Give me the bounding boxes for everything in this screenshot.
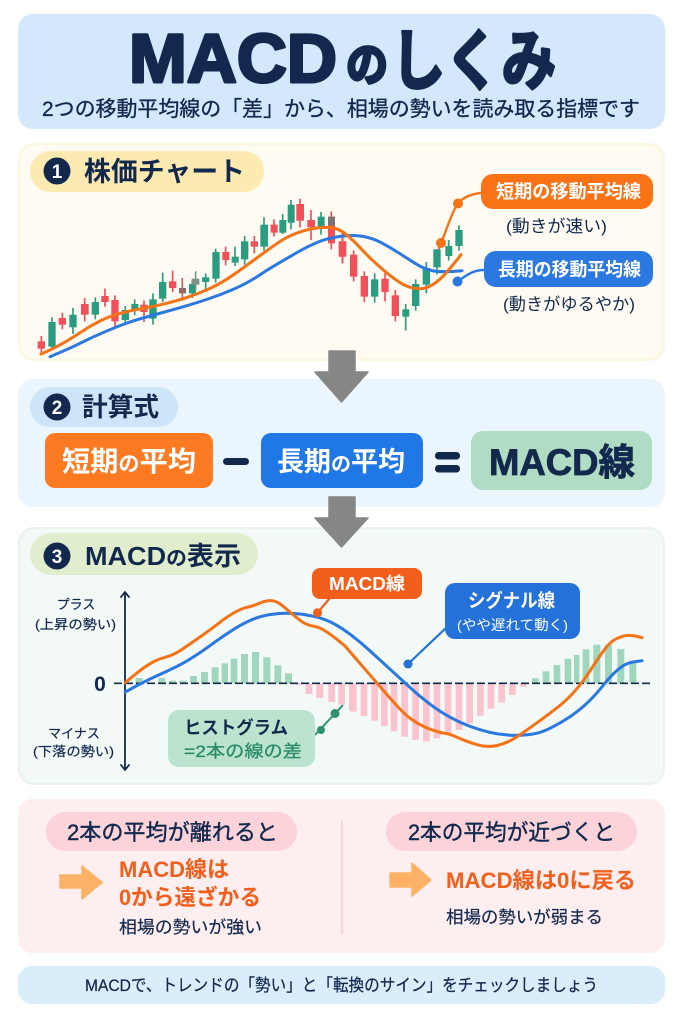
candlesticks left <box>38 199 346 355</box>
callout: histogram: =2本の線の差 <box>184 742 302 761</box>
callout: signal line <box>404 583 580 668</box>
heading: MACD display: MACDの表示 <box>85 541 241 571</box>
icon: arrow right <box>60 866 102 899</box>
header panel <box>18 14 665 129</box>
y axis labels: マイナス <box>48 726 100 741</box>
panel: MACD display <box>19 528 664 784</box>
box: MACD line result <box>471 431 652 490</box>
candlesticks right <box>339 225 463 331</box>
callout: signal line: シグナル線 <box>468 589 555 612</box>
arrow: formula to display <box>315 497 368 547</box>
equals sign <box>435 452 460 472</box>
column: averages diverge: 0から遠ざかる <box>119 885 261 910</box>
label: short moving average: (動きが速い) <box>506 217 607 236</box>
box: short average <box>45 433 213 488</box>
label: long moving average: 長期の移動平均線 <box>498 259 641 280</box>
arrow: chart to formula <box>315 351 368 402</box>
title: しくみ <box>391 24 556 98</box>
title <box>129 20 556 98</box>
callout: signal line: (やや遅れて動く) <box>457 617 568 633</box>
column: averages diverge: MACD線は <box>119 857 229 882</box>
short moving average line <box>41 227 461 354</box>
signal line <box>125 613 642 735</box>
box: MACD line result: MACD線 <box>489 442 635 483</box>
heading: MACD display <box>30 533 258 575</box>
label: long moving average <box>452 251 653 314</box>
column: averages converge: 2本の平均が近づくと <box>408 820 615 845</box>
footer banner: MACDで、トレンドの「勢い」と「転換のサイン」をチェックしましょう <box>85 976 598 995</box>
title: MACD <box>129 20 337 97</box>
MACD line <box>125 601 642 746</box>
callout: MACD line <box>312 568 422 617</box>
label: short moving average: 短期の移動平均線 <box>496 181 641 202</box>
column: averages converge <box>386 812 637 927</box>
y axis labels: プラス <box>57 597 95 612</box>
panel: formula <box>18 379 665 507</box>
subtitle: 2つの移動平均線の「差」から、相場の勢いを読み取る指標です <box>42 98 640 121</box>
y axis labels: (下落の勢い) <box>33 744 114 759</box>
heading: formula: 2 <box>52 398 62 419</box>
zero line <box>114 682 652 684</box>
footer banner <box>18 966 665 1004</box>
heading: stock chart: 1 <box>52 162 63 183</box>
column: averages converge: 相場の勢いが弱まる <box>446 908 603 927</box>
callout: MACD line: MACD線 <box>329 574 405 594</box>
callout: histogram <box>168 705 343 767</box>
column: averages converge: MACD線は0に戻る <box>446 868 636 893</box>
panel: interpretation <box>18 799 665 953</box>
minus sign <box>223 458 249 465</box>
heading: MACD display: 3 <box>52 547 62 568</box>
heading: formula <box>30 387 178 427</box>
label: short moving average <box>436 174 653 248</box>
heading: stock chart: 株価チャート <box>84 157 245 187</box>
long moving average line <box>50 235 462 357</box>
heading: stock chart <box>30 151 264 192</box>
box: long average <box>261 433 423 488</box>
y axis labels <box>33 597 116 759</box>
callout: histogram: ヒストグラム <box>184 717 288 738</box>
y axis labels: 0 <box>94 673 106 696</box>
column: averages diverge: 相場の勢いが強い <box>119 918 262 937</box>
box: long average: 長期の平均 <box>277 447 405 477</box>
title: の <box>346 39 388 91</box>
icon: arrow right <box>390 863 431 896</box>
heading: formula: 計算式 <box>82 392 159 422</box>
vertical axis <box>121 592 129 770</box>
label: long moving average: (動きがゆるやか) <box>503 295 635 314</box>
column: averages diverge <box>46 812 297 937</box>
y axis labels: (上昇の勢い) <box>35 617 116 632</box>
panel: stock chart <box>19 144 664 360</box>
histogram left <box>136 652 354 710</box>
column: averages diverge: 2本の平均が離れると <box>67 820 278 845</box>
box: short average: 短期の平均 <box>62 446 196 477</box>
histogram right <box>350 645 636 741</box>
